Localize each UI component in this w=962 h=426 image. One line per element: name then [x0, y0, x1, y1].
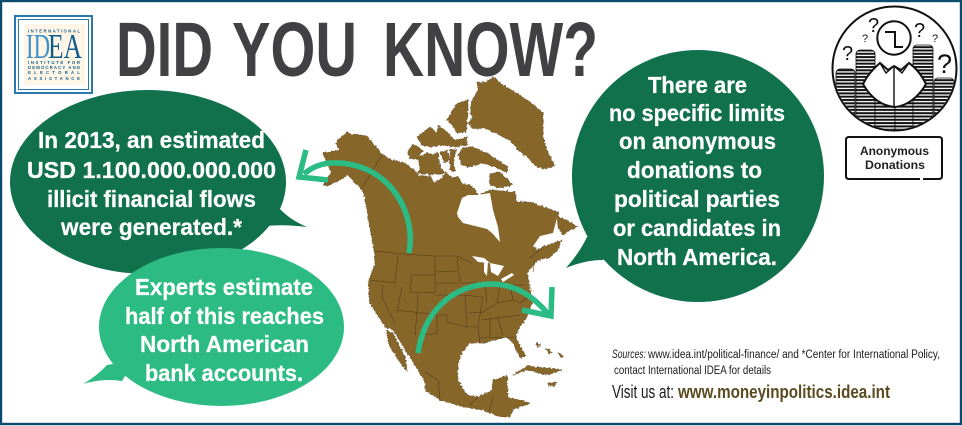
- title: DID: [116, 7, 213, 93]
- logo: International IDEA: [15, 16, 92, 93]
- bubble: anonymous donations limits: no specific limits: [609, 100, 785, 126]
- icon: anonymous donations: ?: [862, 33, 868, 45]
- icon: anonymous donations: ?: [932, 33, 938, 45]
- bubble: illicit financial flows: USD 1.100.000.000.000: [27, 157, 276, 183]
- icon: anonymous donations: ?: [842, 43, 853, 65]
- bubble: anonymous donations limits: donations to: [627, 157, 762, 183]
- bubble: anonymous donations limits: [566, 50, 824, 302]
- arrow: curved to the west: [299, 150, 410, 253]
- sources text: Sources:: [612, 349, 646, 361]
- bubble: North American bank accounts: bank accounts.: [145, 360, 303, 386]
- bubble: North American bank accounts: North American: [140, 331, 309, 357]
- bubble: North American bank accounts: [83, 248, 344, 406]
- website link: [612, 382, 890, 402]
- logo: International IDEA: ELECTORAL: [28, 70, 80, 75]
- sources text: contact International IDEA for details: [614, 365, 771, 377]
- bubble: illicit financial flows: illicit financial flows: [47, 186, 256, 212]
- bubble: illicit financial flows: In 2013, an estimated: [38, 127, 265, 153]
- icon: anonymous donations: ?: [937, 49, 952, 79]
- sources text: [612, 349, 940, 377]
- label box: Anonymous Donations: Donations: [865, 160, 925, 172]
- bubble: illicit financial flows: were generated.*: [60, 214, 243, 240]
- bubble: anonymous donations limits: There are: [648, 72, 747, 98]
- bubble: illicit financial flows: [10, 90, 307, 274]
- website link: Visit us at:: [612, 382, 674, 402]
- icon: anonymous donations: [832, 6, 956, 140]
- bubble: anonymous donations limits: on anonymous: [619, 128, 776, 154]
- logo: International IDEA: INSTITUTE FOR: [28, 60, 81, 65]
- Hudson Bay and lakes: [457, 193, 558, 282]
- logo: International IDEA: INTERNATIONAL: [28, 28, 80, 34]
- label box: Anonymous Donations: [846, 137, 942, 179]
- website link: www.moneyinpolitics.idea.int: [677, 382, 890, 402]
- logo: International IDEA: ASSISTANCE: [28, 76, 80, 81]
- logo: International IDEA: EA: [48, 27, 83, 66]
- bubble: anonymous donations limits: North America.: [617, 244, 777, 270]
- logo: International IDEA: ID: [26, 27, 50, 66]
- map: North America: [322, 76, 578, 417]
- title: YOU: [232, 7, 357, 93]
- bubble: anonymous donations limits: political parties: [614, 186, 780, 212]
- bubble: North American bank accounts: half of this reaches: [125, 303, 324, 329]
- bubble: anonymous donations limits: or candidates in: [613, 215, 781, 241]
- title: [116, 7, 598, 93]
- state and province borders: [362, 155, 545, 412]
- arrow: curved to the east: [418, 284, 552, 353]
- label box: Anonymous Donations: Anonymous: [860, 146, 929, 158]
- bubble: North American bank accounts: Experts estimate: [135, 274, 313, 300]
- icon: anonymous donations: ?: [914, 20, 925, 42]
- icon: anonymous donations: ?: [868, 15, 879, 37]
- title: KNOW?: [383, 7, 598, 93]
- logo: International IDEA: DEMOCRACY AND: [28, 65, 80, 70]
